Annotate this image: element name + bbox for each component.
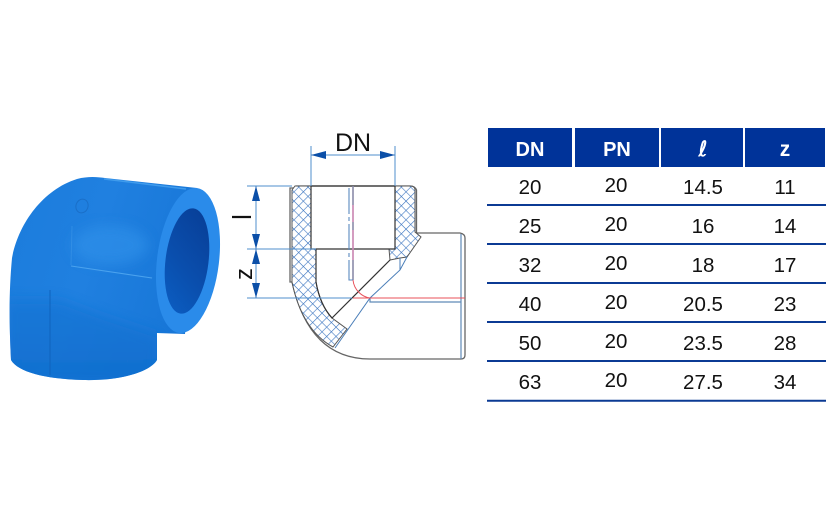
table rows: 40 xyxy=(519,293,541,316)
body shading xyxy=(5,179,186,385)
photo: blue pipe elbow xyxy=(5,177,228,385)
hatched wall right xyxy=(389,186,421,260)
red centre lines xyxy=(353,280,465,298)
table rows: 28 xyxy=(774,332,796,355)
table rows: 20 xyxy=(605,252,627,275)
table rows: 27.5 xyxy=(683,371,723,394)
socket opening xyxy=(159,206,215,316)
table header: z xyxy=(780,138,790,161)
mold mark xyxy=(74,197,90,215)
right-hand pipe inner line xyxy=(370,234,461,359)
table rows: 20 xyxy=(605,330,627,353)
table rows: 34 xyxy=(774,371,796,394)
table header: ℓ xyxy=(698,137,707,161)
elbow body xyxy=(10,177,197,380)
table rows: 14 xyxy=(774,215,796,238)
specification table xyxy=(487,128,826,401)
table rows: 14.5 xyxy=(683,176,723,199)
table rows: 63 xyxy=(519,371,541,394)
bore lines xyxy=(311,186,395,318)
table rows: 50 xyxy=(519,332,541,355)
table rows: 18 xyxy=(692,254,714,277)
dimension DN: DN xyxy=(335,129,371,157)
table header: DN xyxy=(516,139,544,161)
table rows: 23 xyxy=(774,293,796,316)
table rows: 17 xyxy=(774,254,796,277)
socket face ring xyxy=(148,184,228,337)
dimension l and z xyxy=(227,186,352,298)
table rows: 20 xyxy=(605,174,627,197)
mitre line xyxy=(335,257,407,348)
table rows: 16 xyxy=(692,215,714,238)
hatched wall left xyxy=(292,186,347,347)
table rows: 20 xyxy=(519,176,541,199)
table rows: 20.5 xyxy=(683,293,723,316)
dimension DN xyxy=(311,129,395,186)
table rows: 20 xyxy=(605,291,627,314)
table rows: 20 xyxy=(605,213,627,236)
table rows: 32 xyxy=(519,254,541,277)
centre line vertical xyxy=(352,186,354,280)
dimension l and z: l xyxy=(227,214,257,220)
table rows: 11 xyxy=(774,176,796,199)
table header: PN xyxy=(603,139,631,161)
cross-section diagram xyxy=(227,129,465,359)
elbow outer outline xyxy=(290,186,465,359)
table rows: 23.5 xyxy=(683,332,723,355)
table rows: 25 xyxy=(519,215,541,238)
table rows xyxy=(487,174,826,401)
table rows: 20 xyxy=(605,369,627,392)
dimension l and z: z xyxy=(231,268,258,280)
table header xyxy=(488,128,825,167)
